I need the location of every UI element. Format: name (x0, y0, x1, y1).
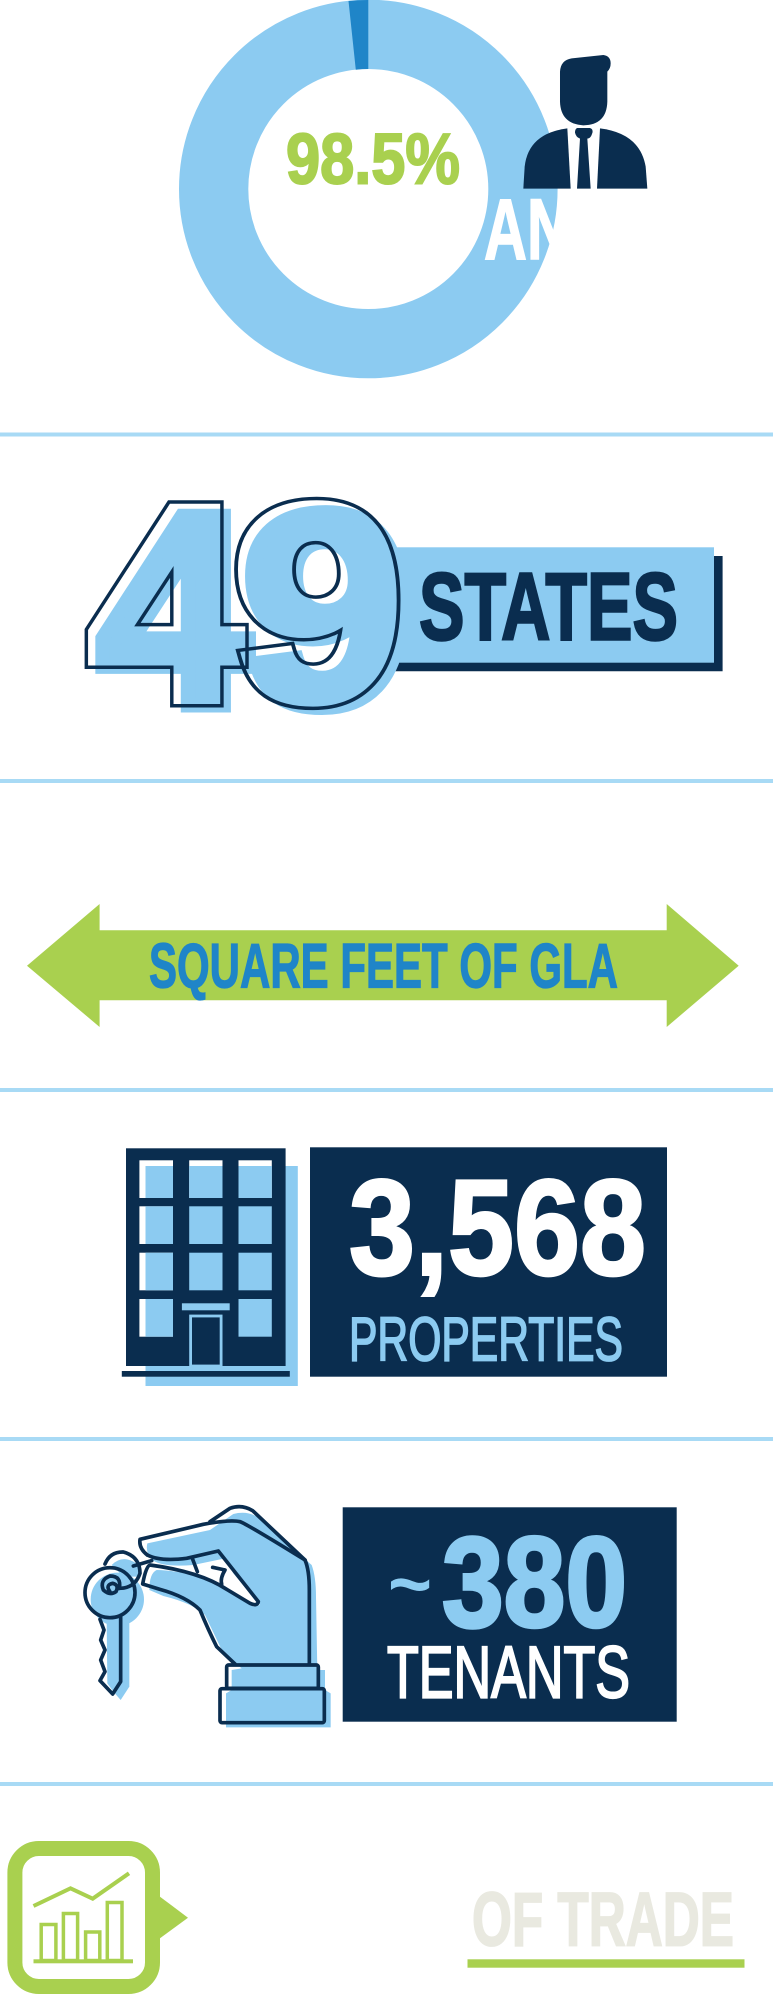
icon: building (122, 1148, 298, 1386)
donut slice (348, 0, 368, 70)
panel: 49 states (0, 440, 773, 764)
number 49 fill (98, 456, 411, 764)
icon: chart speech bubble (15, 1848, 188, 1986)
icon: hand holding key (85, 1507, 331, 1727)
properties stat box (310, 1147, 667, 1377)
number 49 outline (84, 496, 400, 710)
white clipped label: AN (484, 182, 570, 278)
states banner shadow (385, 556, 723, 671)
divider 5 (0, 1782, 773, 1786)
trade underline (468, 1959, 744, 1968)
panel: square feet arrow (27, 904, 739, 1027)
divider 2 (0, 779, 773, 783)
properties number: 3,568 (349, 1152, 646, 1304)
divider 1 (0, 432, 773, 436)
donut ring (214, 34, 523, 344)
tilde: ~ (388, 1539, 432, 1628)
panel: occupancy donut (214, 0, 647, 344)
divider 4 (0, 1437, 773, 1441)
occupancy percentage: 98.5% (286, 120, 460, 200)
panel: properties (122, 1147, 667, 1386)
states banner (394, 547, 714, 663)
divider 3 (0, 1088, 773, 1092)
number 49 fill: 4 (98, 457, 252, 764)
number 49 fill: 9 (242, 456, 411, 764)
panel: tenants (85, 1507, 677, 1727)
tenants stat box (343, 1507, 677, 1722)
properties label: PROPERTIES (349, 1306, 623, 1374)
panel: trade (15, 1848, 744, 1986)
states label: STATES (419, 554, 678, 660)
tenants number: 380 (442, 1512, 627, 1654)
double-headed arrow (27, 904, 739, 1027)
icon: businessman (523, 55, 647, 189)
tenants label: TENANTS (387, 1632, 630, 1714)
